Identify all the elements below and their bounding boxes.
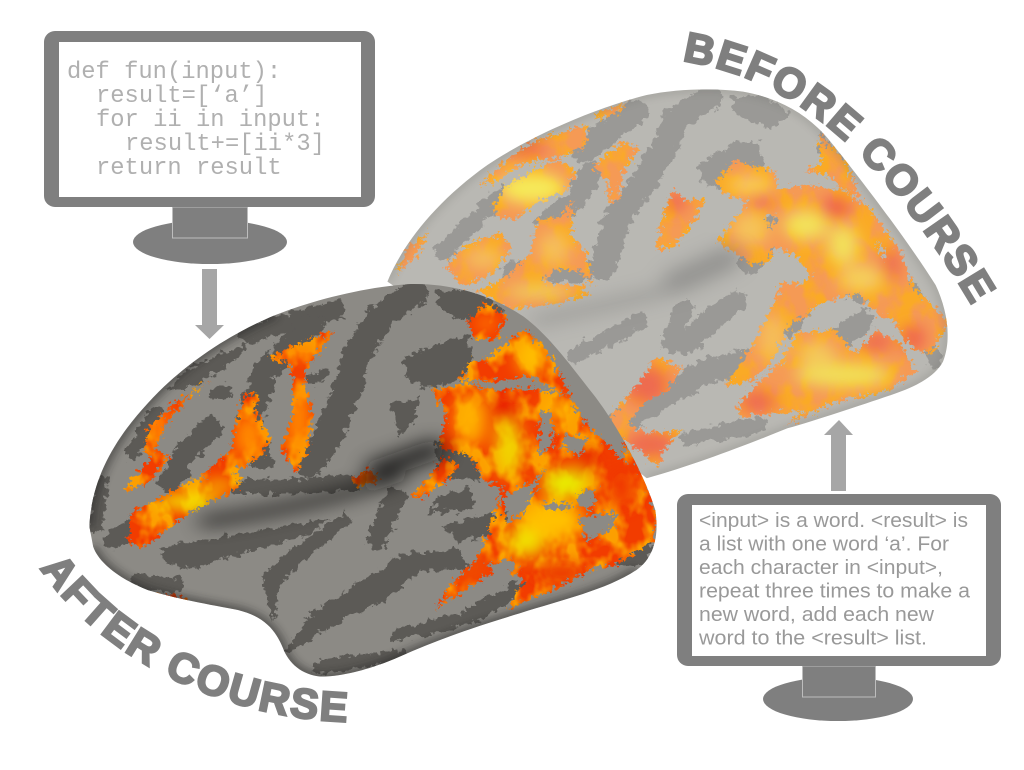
- description text: repeat three times to make a: [699, 580, 971, 602]
- activation patches: before course: [394, 100, 948, 468]
- rim shade: before course: [387, 89, 948, 478]
- monitor base: [133, 220, 287, 264]
- monitor: code: [44, 31, 375, 264]
- rim shading: after course: [89, 315, 636, 677]
- monitor stand: [802, 666, 876, 697]
- monitor base: [763, 677, 913, 721]
- description text: new word, add each new: [699, 604, 935, 626]
- monitor stand: [172, 207, 248, 238]
- heading: before course: BEFORE COURSE: [684, 31, 997, 306]
- cortical sulci: after course: [95, 290, 644, 667]
- code text: result+=[ii*3]: [125, 131, 325, 158]
- arrow: code to after-course brain: [195, 269, 224, 339]
- brain: before course: [388, 89, 948, 478]
- monitor frame: [677, 494, 1001, 666]
- arrow: description to before-course brain: [824, 420, 853, 491]
- monitor screen: [692, 505, 986, 656]
- fissure shading: after course: [204, 450, 433, 522]
- code text: def fun(input):: [67, 59, 281, 86]
- heading: after course: AFTER COURSE: [38, 558, 348, 723]
- cortical sulci: before course: [443, 95, 936, 455]
- monitor frame: [44, 31, 375, 207]
- monitor: description: [677, 494, 1001, 721]
- brain: after course: [89, 284, 657, 677]
- code text: for ii in input:: [96, 107, 324, 134]
- description text: a list with one word ‘a’. For: [699, 534, 949, 556]
- code text: result=[‘a’]: [96, 83, 267, 110]
- code text: return result: [96, 155, 282, 182]
- fissure shading: before course: [536, 258, 728, 322]
- activation patches: after course: [123, 300, 657, 612]
- description text: <input> is a word. <result> is: [699, 510, 968, 532]
- description text: each character in <input>,: [699, 557, 943, 579]
- monitor screen: [59, 42, 361, 197]
- description text: word to the <result> list.: [698, 628, 927, 650]
